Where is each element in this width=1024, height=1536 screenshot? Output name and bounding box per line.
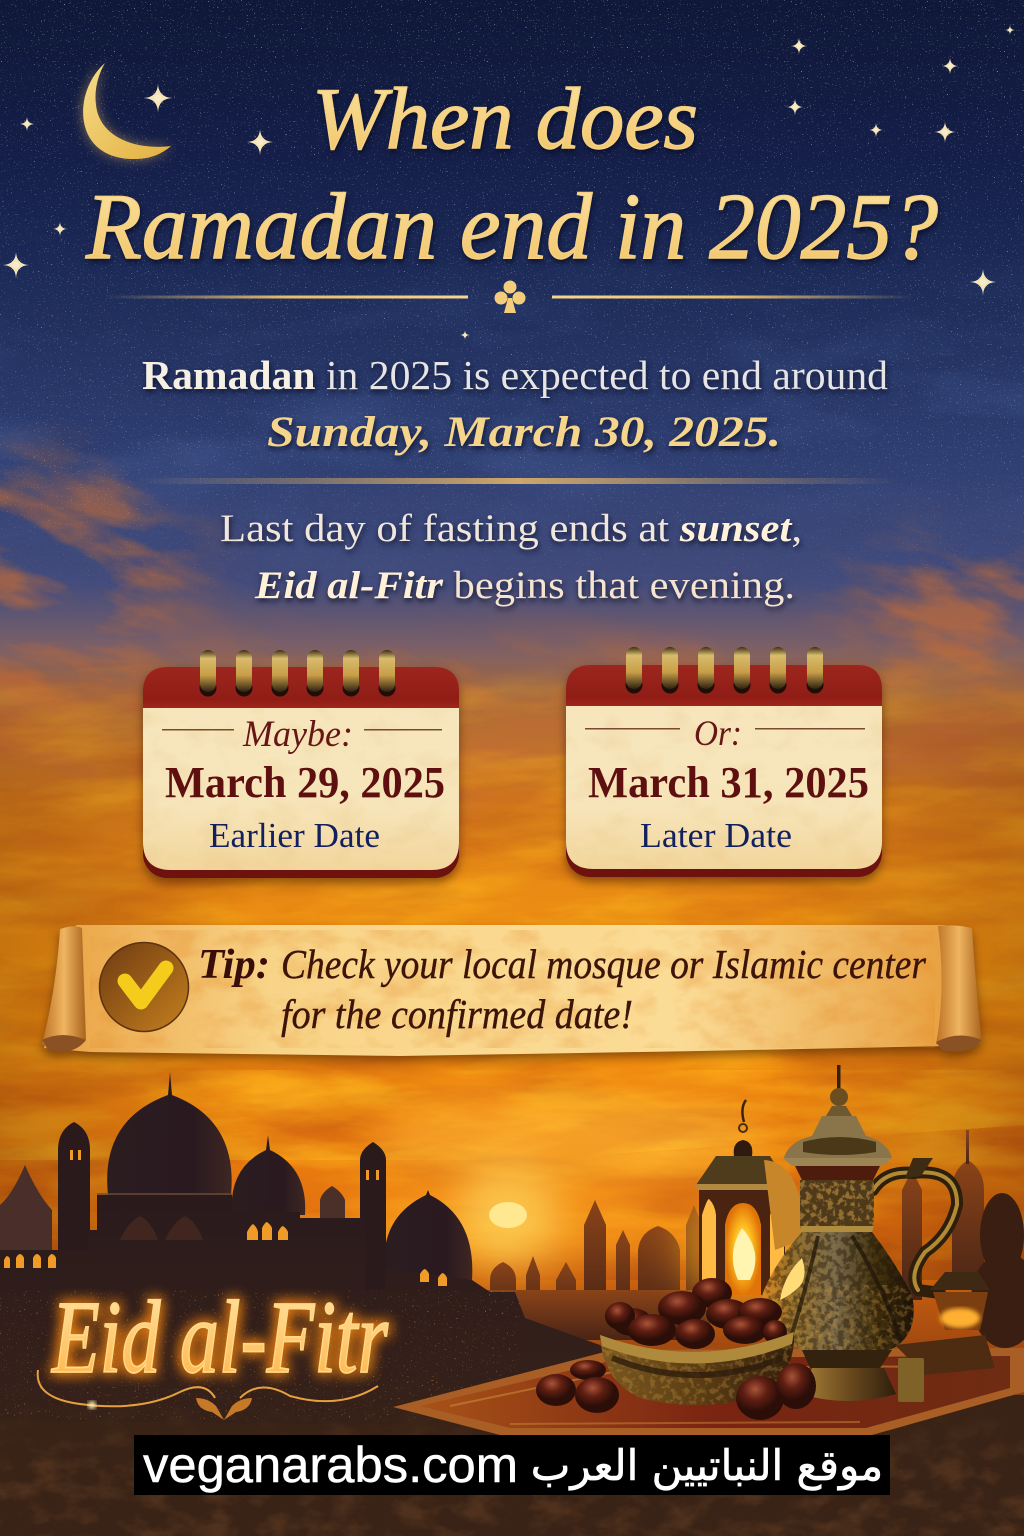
panel: calendar earlier date: March 29, 2025 bbox=[165, 758, 445, 807]
text block: sunset and Eid bbox=[220, 507, 802, 607]
text block: sunset and Eid: Eid al-Fitr begins that evening. bbox=[254, 564, 795, 607]
panel: calendar later date: Later Date bbox=[640, 816, 792, 855]
panel: calendar later date bbox=[566, 647, 882, 877]
watermark band: veganarabs.com bbox=[143, 1437, 518, 1493]
panel: tip scroll: Tip: bbox=[198, 942, 270, 988]
illustration: bowl of dates bbox=[536, 1278, 816, 1420]
illustration: setting sun bbox=[458, 1165, 558, 1265]
panel: tip scroll: for the confirmed date! bbox=[281, 991, 633, 1037]
title bbox=[85, 71, 938, 279]
title: When does bbox=[312, 71, 698, 168]
illustration: brass coffee pot bbox=[762, 1065, 957, 1401]
panel: tip scroll: Check your local mosque or Islamic center bbox=[281, 941, 927, 987]
watermark band: موقع النباتيين العرب bbox=[531, 1441, 883, 1491]
watermark band bbox=[134, 1435, 890, 1495]
illustration: lit mosque windows bbox=[4, 1150, 447, 1286]
panel: calendar later date: Or: bbox=[694, 713, 742, 753]
text block: sunset and Eid: Last day of fasting ends at sunset, bbox=[220, 507, 802, 550]
illustration: mosque silhouette bbox=[0, 1072, 640, 1536]
panel: calendar later date: March 31, 2025 bbox=[588, 758, 869, 807]
icon: check badge bbox=[100, 942, 188, 1032]
illustration: trees bbox=[971, 1193, 1024, 1348]
panel: calendar earlier date: Earlier Date bbox=[209, 816, 380, 855]
icons: sparkling stars bbox=[3, 25, 1015, 340]
panel: tip scroll bbox=[42, 925, 982, 1056]
illustration: glowing lantern bbox=[680, 1100, 804, 1307]
panel: calendar earlier date bbox=[143, 650, 459, 878]
illustration: distant city skyline bbox=[480, 1130, 984, 1340]
logo: Eid al-Fitr script: Eid al-Fitr bbox=[50, 1280, 388, 1395]
ornamental divider bbox=[105, 280, 915, 313]
logo: Eid al-Fitr script bbox=[38, 1280, 388, 1420]
panel: calendar earlier date: Maybe: bbox=[242, 714, 353, 755]
illustration: ground bbox=[0, 1380, 1024, 1536]
text block: end date bbox=[142, 352, 888, 456]
text block: end date: Ramadan in 2025 is expected to end around bbox=[142, 352, 888, 398]
text block: end date: Sunday, March 30, 2025. bbox=[267, 409, 781, 456]
title: Ramadan end in 2025? bbox=[85, 175, 938, 279]
illustration: patterned rug bbox=[393, 1348, 1024, 1435]
icon: crescent moon bbox=[83, 63, 171, 159]
illustration: small lantern and book bbox=[895, 1272, 995, 1402]
